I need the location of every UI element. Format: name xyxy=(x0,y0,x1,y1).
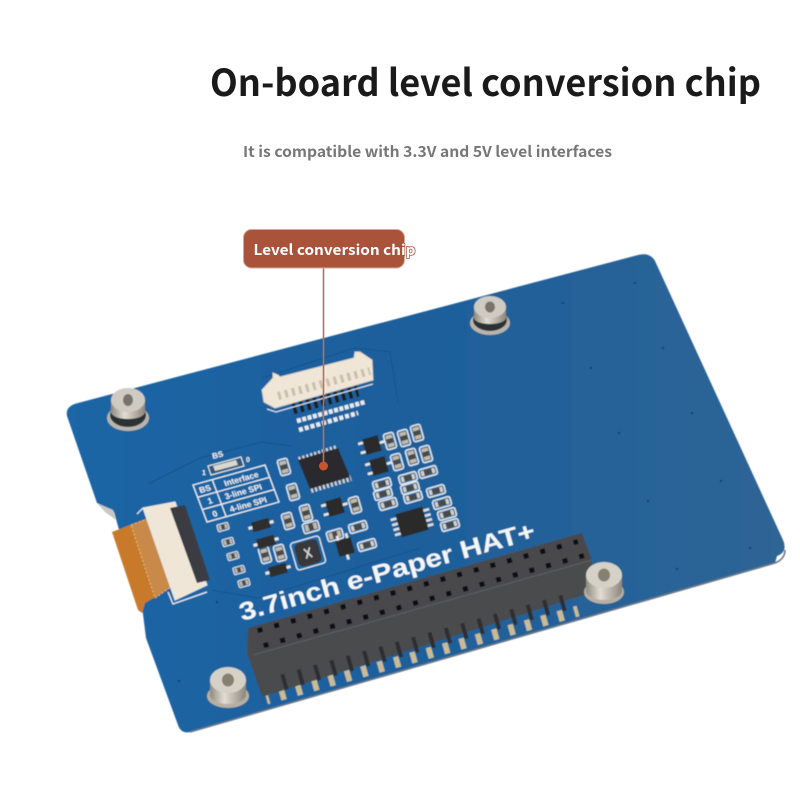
standoff: front left xyxy=(207,667,249,708)
standoff: rear left xyxy=(107,388,149,431)
interface table: 3-line SPI xyxy=(223,482,263,501)
interface table: 4-line SPI xyxy=(228,495,268,514)
pad column xyxy=(217,522,250,588)
circuit board xyxy=(67,254,785,732)
transistors and diodes xyxy=(247,434,394,578)
standoff: rear right xyxy=(470,296,510,335)
BS jumper: 0 xyxy=(246,457,250,464)
interface table: Interface xyxy=(222,469,260,488)
ribbon cable contacts xyxy=(131,519,172,598)
inductor xyxy=(290,535,326,571)
board bottom edge xyxy=(190,550,785,732)
callout xyxy=(244,230,416,268)
header front ridges xyxy=(270,599,577,686)
interface table xyxy=(193,465,279,522)
copper trace outlines xyxy=(148,348,420,598)
FPC connector xyxy=(143,502,210,600)
interface table: 0 xyxy=(211,508,219,519)
subtitle: It is compatible with 3.3V and 5V level interfaces xyxy=(243,141,612,162)
FPC silkscreen xyxy=(137,508,207,604)
standoff: front right xyxy=(584,562,624,604)
callout: Level conversion chip xyxy=(254,239,416,260)
board notch xyxy=(97,503,116,520)
chip marker dot xyxy=(319,462,328,470)
level conversion chip xyxy=(298,448,351,490)
header solder pins xyxy=(266,611,578,699)
BS jumper xyxy=(202,449,250,477)
BS jumper: BS xyxy=(211,449,225,461)
connector pin labels xyxy=(297,402,365,430)
SOIC chip xyxy=(389,505,435,539)
board label: 3.7inch e-Paper HAT+ xyxy=(236,517,538,627)
top connector xyxy=(262,352,373,412)
board outline xyxy=(67,254,785,732)
interface table: BS xyxy=(198,482,213,495)
title: On-board level conversion chip xyxy=(210,53,761,107)
40-pin header xyxy=(247,533,592,699)
board vias xyxy=(178,282,751,682)
resistors near chip xyxy=(258,424,460,564)
leader line xyxy=(322,266,324,466)
BS jumper: 1 xyxy=(202,470,206,477)
interface table: 1 xyxy=(206,495,214,506)
header socket rows xyxy=(258,542,584,646)
ribbon cable xyxy=(112,518,172,613)
